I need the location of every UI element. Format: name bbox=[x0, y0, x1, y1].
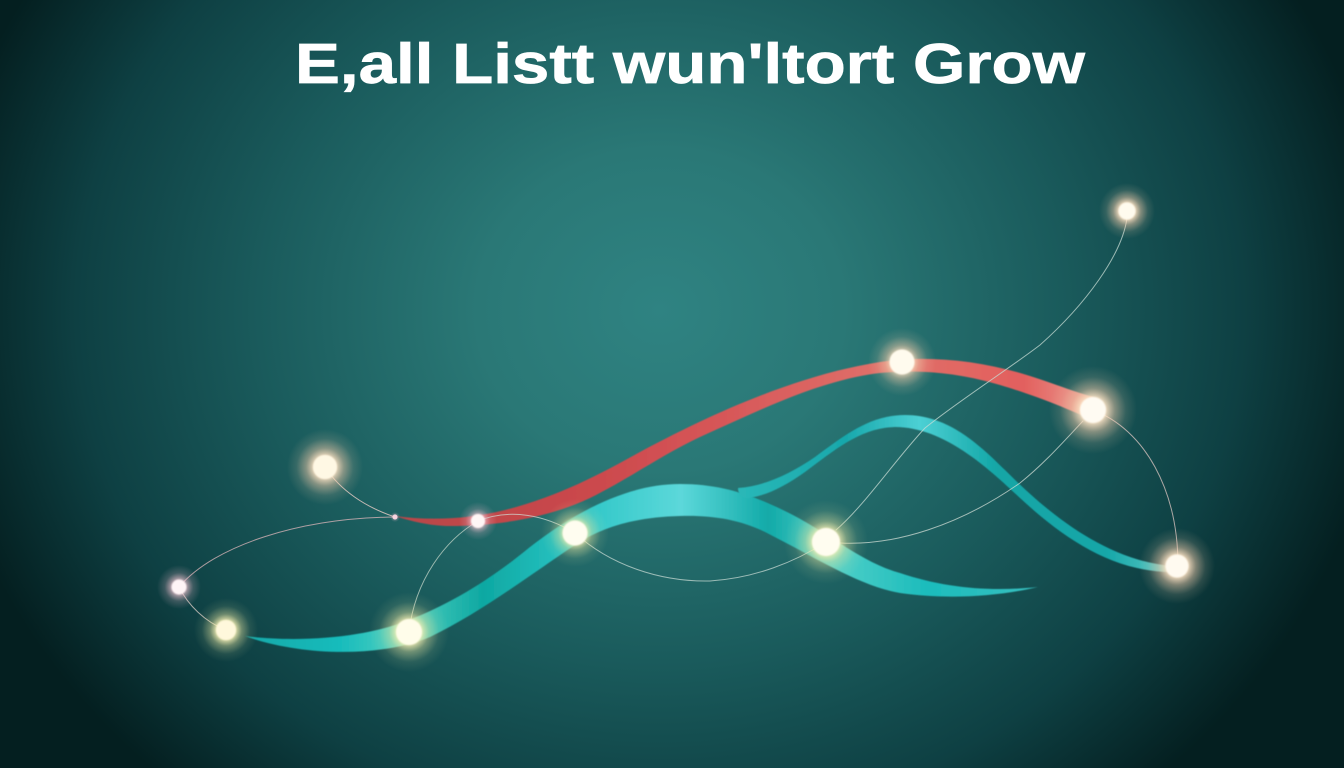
teal ribbon: upper wave bbox=[738, 415, 1172, 572]
line: pink node to gold node bbox=[409, 521, 478, 632]
node: top left bbox=[287, 429, 363, 505]
node: red ribbon peak bbox=[868, 328, 936, 396]
line: bright node to right red node bbox=[840, 421, 1083, 543]
node: lower teal ribbon bbox=[369, 592, 449, 672]
node: pink on red ribbon bbox=[459, 502, 497, 540]
line: top node down to centre-right node bbox=[836, 218, 1127, 530]
line: pink node through bright node and lower arc bbox=[478, 514, 826, 581]
node: small pink junction bbox=[390, 512, 400, 522]
line: far-left node arc to small node bbox=[179, 517, 395, 587]
node: far right bbox=[1139, 528, 1215, 604]
node: lower left bbox=[194, 598, 258, 662]
line: far-left node to lower-left node bbox=[179, 587, 226, 630]
line: top-left node to small node bbox=[325, 467, 395, 517]
node: top right bbox=[1099, 183, 1155, 239]
teal ribbon: lower wave bbox=[245, 484, 1038, 652]
nodes bbox=[157, 183, 1215, 672]
node: far left bbox=[157, 565, 201, 609]
node: bright on teal ribbon bbox=[541, 499, 609, 567]
red ribbon bbox=[395, 359, 1093, 526]
connector lines bbox=[179, 218, 1178, 632]
title: E,all Listt wun'ltort Grow bbox=[295, 32, 1086, 96]
node: red ribbon end bbox=[1049, 366, 1137, 454]
node: centre right on teal ribbon bbox=[784, 500, 868, 584]
line: right red node to far-right node bbox=[1093, 410, 1178, 566]
